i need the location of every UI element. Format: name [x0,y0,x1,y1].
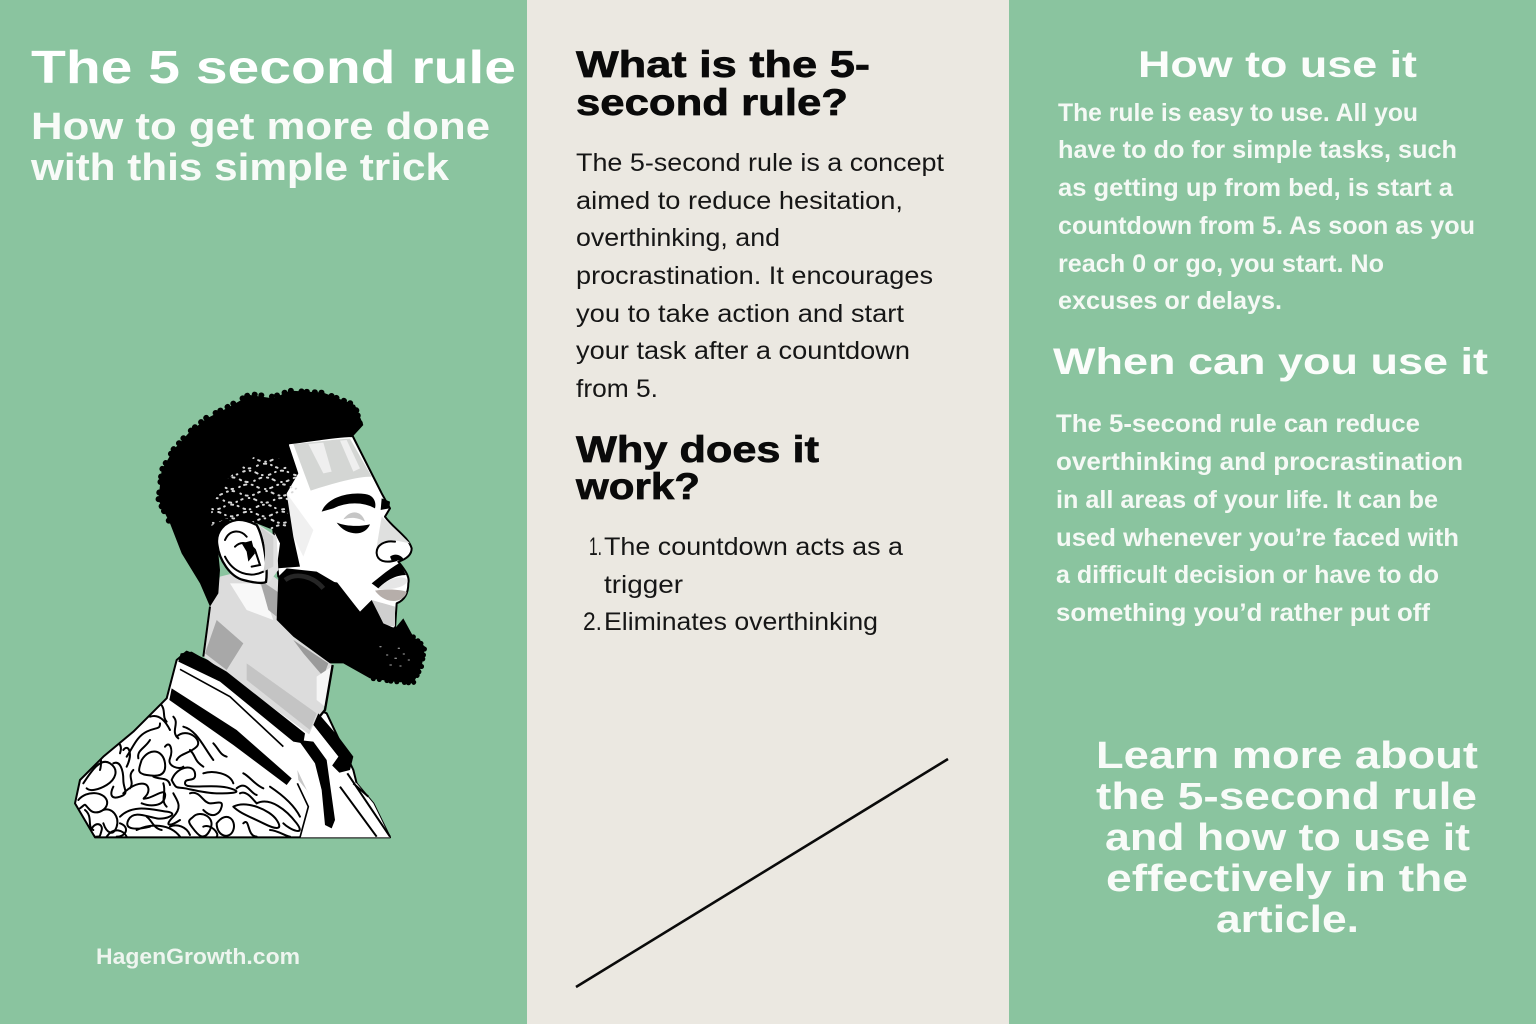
text block: when to use: in all areas of your life. It can be [1056,486,1438,514]
heading: what is the rule: second rule? [576,82,848,123]
call to action: article. [1216,899,1359,941]
text block: definition: your task after a countdown [576,337,910,365]
face [273,436,412,628]
diagonal line [576,759,948,987]
moustache and lips [372,563,406,588]
text block: how to use: excuses or delays. [1058,287,1282,315]
text block: how to use: have to do for simple tasks, such [1058,136,1457,164]
text block: how to use: as getting up from bed, is start a [1058,174,1454,202]
neck [203,567,333,735]
numbered list: The countdown acts as a [604,533,903,561]
curl highlights [211,457,298,530]
subtitle: How to get more done [31,106,490,148]
text block: when to use: overthinking and procrastination [1056,448,1463,476]
heading: when can you use it: When can you use it [1053,341,1488,382]
text block: definition: you to take action and start [576,300,904,328]
numbered list: 1. [589,533,602,561]
shirt collar [169,652,390,837]
hair [158,391,363,607]
text block: definition [576,149,944,403]
heading: how to use it: How to use it [1138,44,1417,85]
brain pattern [78,703,300,837]
numbered list: trigger [604,571,683,599]
subtitle: with this simple trick [30,147,450,189]
text block: definition: from 5. [576,375,658,403]
illustration: bearded man in profile [75,391,425,837]
text block: when to use: used whenever you’re faced with [1056,524,1459,552]
panel: how and when to use [1053,44,1488,941]
text block: how to use: reach 0 or go, you start. No [1058,250,1384,278]
heading: what is the rule [576,44,870,123]
numbered list: 2. [583,608,602,636]
nose [377,541,397,562]
panel background [527,0,1009,1024]
text block: definition: procrastination. It encourages [576,262,933,290]
numbered list: Eliminates overthinking [604,608,878,636]
heading: why does it work: work? [575,466,700,507]
eyebrow [322,494,390,512]
text block: when to use [1056,410,1463,627]
heading: why does it work: Why does it [576,429,819,470]
text block: definition: The 5-second rule is a concept [576,149,944,177]
text block: how to use [1058,99,1475,315]
panel: cover [30,41,516,969]
call to action: Learn more about [1096,735,1478,777]
call to action: and how to use it [1105,817,1470,859]
text block: definition: aimed to reduce hesitation, [576,187,903,215]
text block: when to use: The 5-second rule can reduce [1056,410,1420,438]
title: The 5 second rule [31,41,516,93]
text block: when to use: a difficult decision or have to do [1056,561,1439,589]
heading: what is the rule: What is the 5- [576,44,870,85]
call to action [1096,735,1478,941]
text block: definition: overthinking, and [576,224,780,252]
text block: how to use: The rule is easy to use. All you [1058,99,1418,127]
beard [277,568,425,683]
curly hair edge [158,391,360,523]
call to action: effectively in the [1106,858,1468,900]
call to action: the 5-second rule [1096,776,1477,818]
text block: when to use: something you’d rather put off [1056,599,1431,627]
subtitle [30,106,490,189]
text block: how to use: countdown from 5. As soon as you [1058,212,1475,240]
panel: explanation [527,0,1009,1024]
closed eye [337,523,370,533]
numbered list [583,533,903,636]
website credit: HagenGrowth.com [96,944,300,969]
ear [217,520,278,583]
heading: why does it work [575,429,819,507]
shirt [75,652,390,837]
